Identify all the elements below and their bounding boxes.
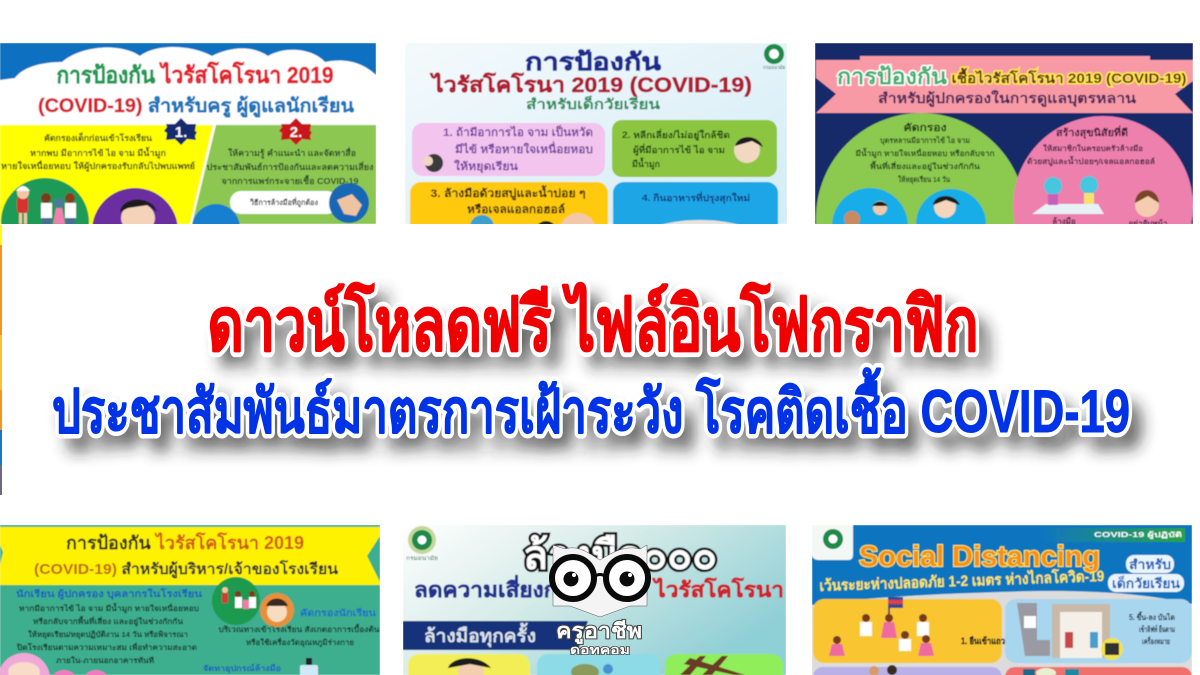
- pink circle: สร้างสุขนิสัยที่ดี: [1056, 125, 1128, 139]
- subheading: สำหรับผู้ปกครองในการดูแลบุตรหลาน: [878, 89, 1136, 107]
- green circle: ให้หยุดเรียน 14 วัน: [898, 175, 951, 184]
- card 5 light blue: เข้าลิฟท์ ยืนตาม: [1139, 624, 1175, 634]
- card 1 pink: ให้หยุดเรียน: [454, 159, 519, 174]
- panel: handwashing poster: [403, 525, 786, 675]
- card 4 blue: [612, 181, 779, 224]
- card 3 yellow: 3. ล้างมือด้วยสบู่และน้ำบ่อย ๆ: [430, 185, 586, 201]
- left column text: หากมีอาการไข้ ไอ จาม มีน้ำมูก หายใจเหนื่อยหอบ: [19, 602, 199, 614]
- card yellow: [408, 654, 530, 675]
- heading line 2: ลดความเสี่ยงการติดเชื้อ ไวรัสโคโรนา: [414, 574, 784, 602]
- handwashing pill: วิธีการล้างมือที่ถูกต้อง: [249, 196, 318, 208]
- for school-age label: สำหรับ: [1129, 557, 1171, 572]
- card purple: [813, 665, 1002, 675]
- card 3 yellow: หรือเจลแอลกอฮอล์: [467, 203, 565, 216]
- students icon: [212, 577, 260, 625]
- supply text: จัดหาอุปกรณ์ล้างมือ: [203, 663, 281, 674]
- title outline red line: ดาวน์โหลดฟรี ไฟล์อินโฟกราฟิก: [208, 281, 978, 366]
- left column text: ภายใน-ภายนอกอาคารทันที: [56, 656, 154, 665]
- main title: [52, 281, 1141, 460]
- navy label bar: [403, 621, 588, 650]
- yellow section text: คัดกรองเด็กก่อนเข้าโรงเรียน: [44, 131, 152, 143]
- blue cloud header: [0, 43, 376, 80]
- for school-age label: เด็กวัยเรียน: [1112, 574, 1180, 591]
- pink ribbon: [816, 56, 1193, 113]
- card 5 light blue: 5. ขึ้น-ลง บันได: [1129, 611, 1175, 622]
- logo wordmark small: ดอทคอม: [570, 643, 630, 657]
- card salmon: [1005, 667, 1192, 675]
- card 2 green: 2. หลีกเลี่ยง/ไม่อยู่ใกล้ชิด: [622, 128, 730, 141]
- card 3 yellow: [409, 181, 609, 224]
- green circle: คัดกรอง: [904, 122, 947, 134]
- heading line 1: การป้องกัน ไวรัสโคโรนา 2019: [66, 532, 304, 553]
- outlined heading: ล้างมือ๐๐๐: [523, 534, 717, 578]
- yellow section text: หายใจเหนื่อยหอบ ให้ผู้ปกครองรับกลับไปพบแพทย์: [1, 159, 195, 172]
- heading line 1: การป้องกัน: [525, 49, 662, 76]
- logo wordmark: ครูอาชีพ: [556, 619, 642, 645]
- heading line 1: การป้องกัน ไวรัสโคโรนา 2019: [56, 61, 334, 88]
- green circle with children: [0, 177, 90, 224]
- heading line 2: (COVID-19) สำหรับผู้บริหาร/เจ้าของโรงเรียน: [34, 559, 339, 579]
- navy label bar: ล้างมือทุกครั้ง: [424, 622, 536, 648]
- pink circle: ล้างมือ: [1052, 216, 1076, 226]
- owl book logo: [552, 545, 648, 657]
- owl book body: [553, 545, 647, 617]
- sick child icon: [260, 593, 294, 627]
- left column text: ให้หยุดเรียน/หยุดปฏิบัติงาน 14 วัน หรือพิจารณา: [28, 630, 188, 639]
- badge 2: [279, 118, 312, 145]
- heading green word: การป้องกัน: [837, 64, 947, 89]
- badge 1: 1.: [175, 124, 187, 141]
- panel: parents poster: [815, 43, 1193, 224]
- green section text: ประชาสัมพันธ์การป้องกันและลดความเสี่ยง: [206, 160, 374, 172]
- badge 1: [164, 118, 197, 145]
- heading yellow words: เชื้อไวรัสโคโรนา 2019 (COVID-19): [952, 67, 1186, 86]
- green section text: [206, 146, 374, 186]
- blue header: [812, 525, 1192, 605]
- panel: social distancing poster: [812, 525, 1192, 675]
- heading line 3: สำหรับเด็กวัยเรียน: [526, 95, 661, 112]
- handwashing pill: [230, 191, 338, 214]
- card green: [665, 654, 783, 675]
- hand icon: [329, 183, 369, 223]
- green circle: [815, 112, 1018, 224]
- pink circle: ด้วยสบู่และน้ำบ่อยๆ/เจลแอลกอฮอล์: [1027, 155, 1155, 167]
- blue circle bottom: [192, 203, 240, 224]
- glasses: [552, 557, 648, 599]
- purple circle with sick child: [92, 187, 178, 224]
- card 1 pink: 1. ถ้ามีอาการไอ จาม เป็นหวัด: [443, 125, 593, 139]
- left column text: หรือกลับจากพื้นที่เสี่ยง และอยู่ในช่วงกักกัน: [33, 615, 184, 627]
- card 1 pink: [412, 123, 605, 176]
- yellow ribbon: [0, 527, 380, 585]
- left colour strip: [0, 225, 2, 495]
- health ministry logo: [763, 44, 785, 71]
- heading line 2: (COVID-19) สำหรับครู ผู้ดูแลนักเรียน: [38, 95, 354, 118]
- left column text: [16, 602, 199, 665]
- green circle: พื้นที่เสี่ยงและอยู่ในช่วงกักกัน: [870, 160, 981, 172]
- card light blue: [537, 654, 660, 675]
- card 5 light blue: เครื่องหมาย: [1142, 635, 1170, 646]
- health ministry logo: กรมอนามัย: [763, 65, 785, 71]
- yellow section text: หากพบ มีอาการไข้ ไอ จาม มีน้ำมูก: [30, 146, 166, 159]
- logo box: [812, 525, 853, 560]
- card 2 green: [612, 120, 777, 177]
- heading line 2: ไวรัสโคโรนา 2019 (COVID-19): [430, 72, 752, 97]
- health ministry logo: [406, 526, 438, 562]
- card 1 yellow: 1. ยืนเข้าแถว: [961, 635, 1005, 646]
- subtitle: เว้นระยะห่างปลอดภัย 1-2 เมตร ห่างไกลโควิด-19: [819, 566, 1105, 595]
- yellow section: [0, 125, 213, 224]
- card 4 blue: 4. กินอาหารที่ปรุงสุกใหม่: [642, 191, 750, 204]
- pink circle: อย่าจับหน้า: [1129, 218, 1167, 228]
- badge 2: 2.: [290, 124, 302, 141]
- sanitizer bottle icon: [300, 658, 318, 675]
- green section text: ให้ความรู้ คำแนะนำ และจัดหาสื่อ: [228, 146, 356, 159]
- for school-age label: [1108, 555, 1184, 592]
- health ministry logo: กรมอนามัย: [406, 555, 438, 562]
- pink circle: ให้สมาชิกในครอบครัวล้างมือ: [1043, 144, 1143, 153]
- pink circle: [1012, 115, 1193, 224]
- panel: teachers poster: [0, 43, 376, 224]
- right heading: คัดกรองนักเรียน: [300, 607, 377, 619]
- green section text: จากการแพร่กระจายเชื้อ COVID-19: [222, 174, 359, 186]
- left column heading: นักเรียน ผู้ปกครอง บุคลากรในโรงเรียน: [16, 588, 203, 601]
- pupils: [564, 572, 634, 586]
- panel: school children poster: [405, 43, 787, 224]
- pink sick figures: [0, 653, 110, 675]
- green circle: บุตรหลานมีอาการไข้ ไอ จาม: [880, 135, 970, 145]
- social distancing title: Social Distancing: [859, 541, 1101, 573]
- panel: administrators poster: [0, 525, 380, 675]
- green section: [192, 125, 376, 224]
- card 2 green: ผู้ที่มีอาการไข้ ไอ จาม: [633, 143, 725, 156]
- card 5 light blue: [1005, 599, 1192, 663]
- green top label: [1040, 528, 1185, 542]
- right text: [218, 623, 380, 648]
- yellow section text: [1, 131, 195, 172]
- green circle: มีน้ำมูก หายใจเหนื่อยหอบ หรือกลับจาก: [855, 147, 995, 159]
- card 1 pink: มีไข้ หรือหายใจเหนื่อยหอบ: [455, 141, 593, 156]
- green top label: COVID-19 ผู้ปฏิบัติ: [1094, 530, 1183, 540]
- card 1 yellow: [813, 597, 1005, 663]
- card 2 green: มีน้ำมูก: [632, 157, 660, 170]
- left column text: ปิดโรงเรียนตามความเหมาะสม เพื่อทำความสะอาด: [16, 641, 197, 652]
- title red line: ดาวน์โหลดฟรี ไฟล์อินโฟกราฟิก: [208, 281, 978, 366]
- right text: หรือใช้เครื่องวัดอุณหภูมิร่างกาย: [246, 636, 354, 648]
- right text: บริเวณทางเข้าโรงเรียน สังเกตอาการเบื้องต้น: [218, 623, 380, 634]
